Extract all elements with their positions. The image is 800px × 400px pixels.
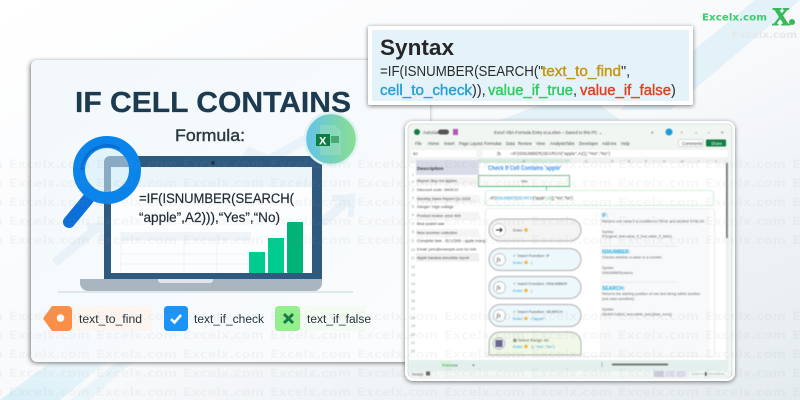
function reference text: Syntax: <box>602 230 614 234</box>
ribbon tabs: Add-ins <box>602 141 616 146</box>
row numbers: 16 <box>411 299 415 303</box>
row numbers <box>411 173 415 353</box>
selected cell <box>478 176 570 192</box>
row numbers: 11 <box>411 256 415 260</box>
step: select range: Enter <box>513 344 523 349</box>
formula bar <box>411 150 728 158</box>
row numbers: 17 <box>411 307 415 311</box>
description column: New summer collection <box>417 230 457 235</box>
function reference text: IF: <box>602 213 608 219</box>
legend item: text_to_find: text_to_find <box>79 314 142 326</box>
ribbon tabs: Developer <box>579 141 599 146</box>
sheet tabs: Formula <box>442 362 458 368</box>
legend item: text_to_find <box>43 306 152 331</box>
ribbon tabs: Share <box>711 141 723 146</box>
ribbon tabs: Data <box>506 141 516 146</box>
syntax formula: )), <box>472 83 486 99</box>
row numbers: 7 <box>412 222 414 226</box>
sheet tabs <box>409 360 728 371</box>
sheet tabs: + <box>472 363 475 369</box>
function reference text: Syntax: <box>602 266 614 270</box>
syntax formula: ) <box>671 83 676 99</box>
ribbon tabs: File <box>415 141 422 146</box>
panel: syntax box <box>368 26 693 105</box>
row numbers: 6 <box>412 213 414 217</box>
title bar: – <box>695 130 698 135</box>
row numbers: 1 <box>412 173 414 177</box>
logo: Excelx.com <box>732 30 797 41</box>
step: select range: ▦ Select Range: A2 <box>513 338 550 342</box>
description column: Danger: High voltage <box>417 204 454 209</box>
function reference text: Returns one value if a condition is TRUE and another if FALSE. <box>602 220 705 224</box>
syntax formula: ", <box>621 64 630 80</box>
panel: excel window <box>405 121 735 381</box>
step: insert SEARCH: Enter <box>513 316 523 321</box>
row numbers: 4 <box>412 196 414 200</box>
row numbers: 10 <box>411 248 415 252</box>
description column: Blue pastel sale <box>417 221 444 226</box>
laptop illustration <box>58 156 353 293</box>
legend item: text_if_false: text_if_false <box>307 314 371 326</box>
syntax formula: cell_to_check <box>380 83 473 99</box>
function reference text: Returns the starting position of one text string within another <box>602 292 701 296</box>
legend <box>43 306 371 331</box>
row numbers: 3 <box>412 188 414 192</box>
sheet: I <box>698 159 699 163</box>
row numbers: 14 <box>411 282 415 286</box>
step: insert ISNUMBER: ( <box>531 288 533 293</box>
row numbers: 20 <box>411 333 415 337</box>
step: insert SEARCH <box>489 304 581 326</box>
step: insert SEARCH: fx <box>496 312 501 320</box>
ribbon tabs: View <box>536 141 546 146</box>
row numbers: 13 <box>411 273 415 277</box>
description column: Description <box>417 166 443 172</box>
title bar: Excel VBA Formula Entry eLa.xlsm – Saved to this PC ⌄ <box>494 130 602 135</box>
row numbers: 15 <box>411 290 415 294</box>
description column: Product review: error 404 <box>417 213 462 218</box>
ribbon tabs: Home <box>428 141 440 146</box>
step: select range: )),"Yes","No") <box>531 344 555 349</box>
row numbers: 21 <box>411 341 415 345</box>
ribbon tabs: Insert <box>444 141 455 146</box>
icon: magnifying glass <box>69 142 135 222</box>
step: insert ISNUMBER: ✓ Insert Function: ISNUMBER <box>513 281 567 286</box>
ribbon tabs: Review <box>518 141 533 146</box>
faint trend arrows <box>58 140 352 260</box>
legend item: text_if_false <box>275 306 371 331</box>
row numbers: 9 <box>412 239 414 243</box>
logo <box>702 4 797 41</box>
syntax heading: Syntax <box>380 35 455 60</box>
function reference text: Syntax: <box>602 308 614 312</box>
row numbers: 18 <box>411 316 415 320</box>
icon: excel badge: X <box>319 136 327 148</box>
title bar: × <box>721 130 724 135</box>
selected cell: Yes <box>521 178 528 184</box>
step: enter: Enter <box>513 228 523 232</box>
panel: left card <box>31 60 430 362</box>
formula bar: fx <box>497 152 501 158</box>
sheet: D <box>611 159 614 163</box>
description column: Email: john@example.com for info <box>417 246 476 252</box>
row numbers: 2 <box>412 180 414 184</box>
ribbon tabs <box>415 140 726 146</box>
icon: excel badge <box>305 113 357 165</box>
function reference text: Checks whether a value is a number. <box>602 256 662 260</box>
step: insert IF <box>489 248 581 270</box>
sheet: A <box>446 159 449 163</box>
step: select range <box>489 332 581 355</box>
subtitle: Formula: <box>175 126 245 145</box>
ribbon tabs: Comments <box>682 141 702 146</box>
status bar: Ready <box>412 372 423 376</box>
step: insert ISNUMBER: fx <box>496 284 501 292</box>
formula bar: =IF(ISNUMBER(SEARCH("apple",A2)),"Yes","No") <box>510 151 611 156</box>
logo: X <box>772 4 790 31</box>
ribbon tabs: Help <box>621 141 630 146</box>
sheet: H <box>681 159 684 163</box>
title: IF CELL CONTAINS <box>75 87 351 119</box>
ribbon tabs: Page Layout <box>459 141 483 146</box>
function reference text: IF(logical_test,value_if_true,value_if_false) <box>602 234 672 238</box>
title bar <box>414 128 724 136</box>
row numbers: 8 <box>412 230 414 234</box>
description column <box>416 160 487 262</box>
step: insert SEARCH: ("apple", <box>531 316 546 321</box>
formula on screen: “apple”,A2))),“Yes”,“No) <box>139 210 280 225</box>
sheet: B <box>523 159 526 163</box>
step: insert IF: fx <box>496 256 501 264</box>
function reference text: (not case-sensitive). <box>602 297 635 301</box>
description column: Apple banana smoothie report <box>417 255 470 260</box>
row numbers: 19 <box>411 324 415 328</box>
syntax formula: , <box>573 83 577 99</box>
description column: Discount code: SAVE10 <box>417 187 459 192</box>
syntax formula: text_to_find <box>542 64 621 80</box>
ribbon tabs: AnalysisTabs <box>550 141 574 146</box>
description column: Complete task - ID:12345 - apple orange <box>417 238 487 243</box>
row numbers: 5 <box>412 205 414 209</box>
function reference text: SEARCH(find_text,within_text,[start_num]) <box>602 312 672 316</box>
ribbon tabs: Formulas <box>484 141 501 146</box>
title bar: ♀ <box>680 130 683 135</box>
sheet: G <box>663 159 666 163</box>
row numbers: 22 <box>411 349 415 353</box>
sheet: J <box>715 159 717 163</box>
logo: Excelx.com <box>702 12 767 24</box>
syntax formula: =IF(ISNUMBER(SEARCH(" <box>380 64 543 80</box>
step: insert ISNUMBER: Enter <box>513 288 523 293</box>
status bar <box>409 371 728 378</box>
check heading: Check If Cell Contains 'apple' <box>488 166 561 172</box>
sheet <box>409 159 728 360</box>
description column: Report: Buy red apples <box>417 178 457 183</box>
step: enter <box>489 219 581 241</box>
function reference text: ISNUMBER: <box>602 250 631 256</box>
vertical scrollbar <box>726 159 728 360</box>
sheet: C <box>585 159 588 163</box>
sheet: F <box>645 159 647 163</box>
watermark overlay <box>0 155 800 400</box>
formula bar: B2 <box>413 151 419 156</box>
sheet: E <box>628 159 631 163</box>
steps panel <box>486 208 714 356</box>
title bar: ⌕ <box>651 130 653 135</box>
title bar: AutoSave <box>423 130 442 135</box>
syntax formula <box>380 64 676 99</box>
step: insert ISNUMBER <box>489 276 581 298</box>
step: insert IF: ✓ Insert Function: IF <box>513 253 550 258</box>
function reference text <box>602 213 705 316</box>
formula box <box>486 190 714 206</box>
legend item: text_if_check: text_if_check <box>194 314 264 326</box>
syntax formula: value_if_true <box>488 83 573 99</box>
step: insert SEARCH: ✓ Insert Function: SEARCH <box>513 309 563 314</box>
bar chart <box>249 222 303 273</box>
function reference text: SEARCH: <box>602 286 625 292</box>
function reference text: ISNUMBER(value) <box>602 271 633 275</box>
description column: Monthly Sales Report Q1-2025 <box>417 196 470 201</box>
step: insert IF: ( <box>531 260 533 265</box>
formula box: =IF(ISNUMBER(SEARCH("apple",A2)),"Yes","No") <box>489 196 574 200</box>
legend item: text_if_check <box>164 306 264 331</box>
step: insert IF: Enter <box>513 260 523 265</box>
title bar: ▫ <box>708 130 710 135</box>
formula on screen: =IF(ISNUMBER(SEARCH( <box>139 191 294 206</box>
row numbers: 12 <box>411 265 415 269</box>
syntax formula: value_if_false <box>580 83 671 99</box>
